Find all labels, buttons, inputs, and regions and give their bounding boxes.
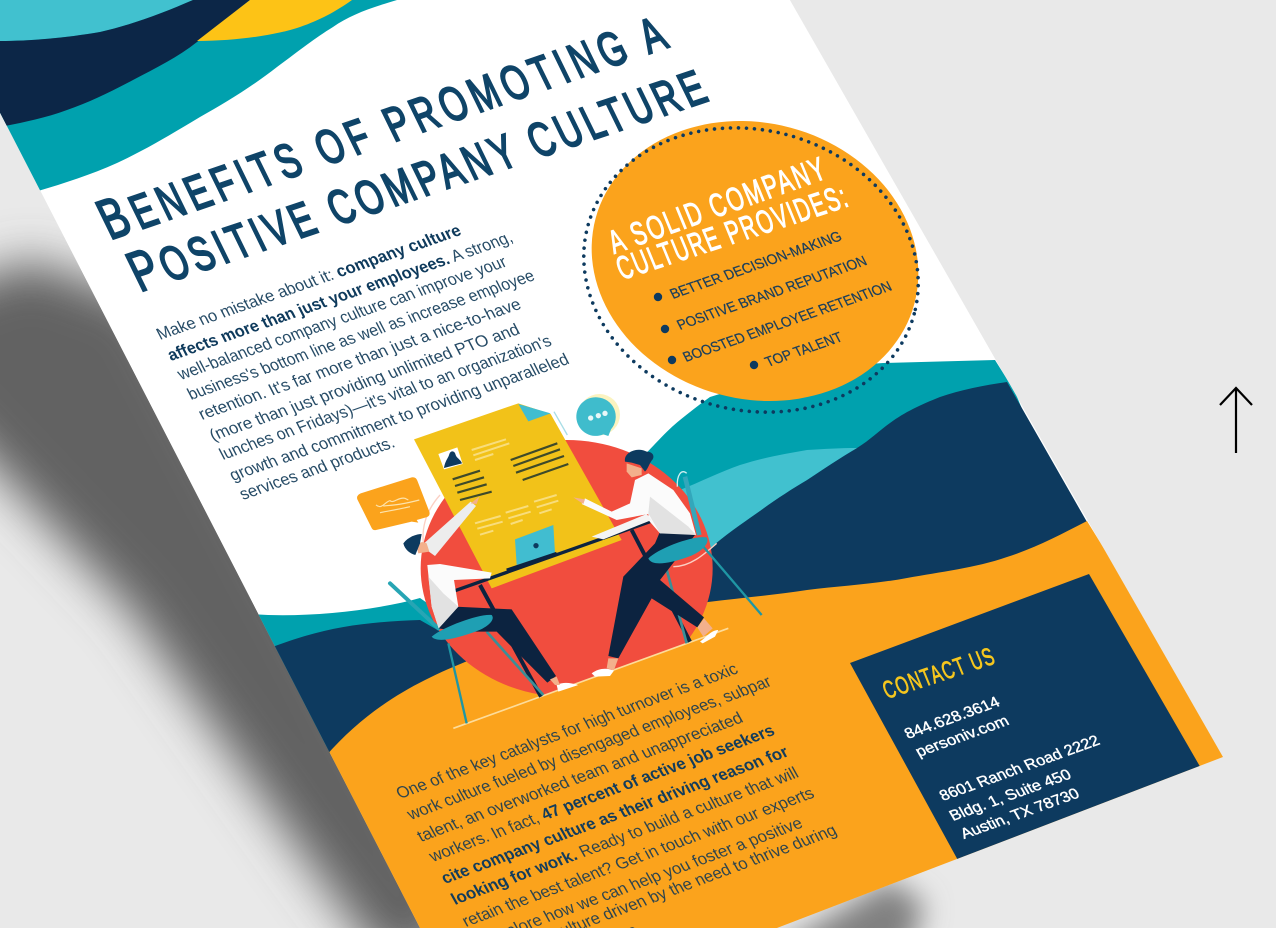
floor line [453, 628, 728, 728]
lower right wave: teal [648, 360, 1022, 548]
list item 1: BETTER DECISION-MAKING [667, 229, 845, 303]
intro line 5: retention. It's far more than just a nice-to-have [195, 295, 524, 424]
top wave: teal [0, 0, 397, 191]
photo silhouette [444, 451, 462, 468]
bottom line 5: cite company culture as their driving reason for [438, 742, 792, 887]
bottom line 1: One of the key catalysts for high turnover is a toxic [393, 659, 742, 802]
lower right wave: navy [707, 382, 1087, 602]
intro line 1: Make no mistake about it: company culture [153, 221, 464, 344]
bottom line 3: talent, an overworked team and unappreciated [414, 709, 746, 845]
photo [438, 447, 463, 469]
title line 1: BENEFITS OF PROMOTING A [87, 0, 676, 252]
illustration: two people at a desk with a resume [357, 394, 762, 728]
scroll-up arrow [1220, 388, 1252, 453]
dotted ring [582, 126, 920, 414]
document sheet [414, 403, 622, 588]
lower left wave: teal [258, 598, 440, 752]
sheet edge accent [554, 412, 567, 435]
laptop [507, 525, 557, 570]
title line 2: POSITIVE COMPANY CULTURE [117, 53, 716, 304]
folded corner [518, 404, 551, 421]
right person chair [665, 472, 762, 643]
bottom line 6: looking for work. Ready to build a culture that will [448, 764, 802, 908]
text lines dark [453, 443, 568, 500]
bottom paragraph [393, 659, 840, 928]
address line 3: Austin, TX 78730 [957, 786, 1083, 842]
list item 4: TOP TALENT [762, 330, 846, 371]
bottom line 2: work culture fueled by disengaged employees, subpar [403, 672, 775, 824]
left person seat [432, 615, 493, 640]
bullet 4 [750, 361, 758, 369]
intro line 2: affects more than just your employees. A strong, [164, 228, 516, 365]
callout heading line 1: A SOLID COMPANY [603, 150, 831, 261]
intro line 7: lunches on Fridays)—it's vital to an organization's [216, 331, 555, 464]
teal speech bubble [576, 394, 620, 436]
top wave: light teal [0, 0, 193, 41]
list item 3: BOOSTED EMPLOYEE RETENTION [680, 279, 895, 366]
top wave: navy [0, 0, 250, 126]
red circle [421, 440, 713, 697]
left person chair [390, 583, 543, 723]
website: personiv.com [912, 713, 1012, 760]
right person seat [648, 537, 708, 563]
bottom line 4: workers. In fact, 47 percent of active job seekers [425, 721, 778, 866]
title [94, 18, 710, 292]
lower right wave: light teal [682, 448, 857, 548]
list item 2: POSITIVE BRAND REPUTATION [674, 254, 870, 334]
resume document [414, 403, 622, 588]
cast shadow of the page [0, 260, 925, 928]
ring highlights [423, 495, 717, 567]
callout heading line 2: CULTURE PROVIDES: [611, 178, 853, 287]
orange circle callout [582, 121, 920, 414]
top wave: yellow [197, 0, 352, 41]
bullet 1 [654, 293, 662, 301]
intro line 3: well-balanced company culture can improve your [173, 252, 510, 384]
intro line 4: business's bottom line as well as increase employee [184, 266, 538, 404]
intro paragraph [153, 221, 572, 504]
desk [455, 522, 690, 697]
text lines light [472, 439, 558, 535]
contact box [850, 574, 1202, 864]
contact panel [850, 574, 1202, 864]
bottom line 7: retain the best talent? Get in touch with our experts [459, 784, 817, 928]
intro line 6: (more than just providing unlimited PTO and [206, 320, 523, 445]
intro line 8: growth and commitment to providing unparalleled [226, 350, 572, 485]
orange speech bubble [357, 477, 430, 530]
right person [573, 450, 718, 677]
address line 1: 8601 Ranch Road 2222 [936, 733, 1103, 804]
left person [403, 497, 578, 692]
orange bottom panel [325, 521, 1240, 928]
lower left wave: navy [274, 620, 466, 753]
circle background [592, 121, 918, 401]
address line 2: Bldg. 1, Suite 450 [946, 767, 1074, 824]
bullet 3 [668, 356, 676, 364]
phone: 844.628.3614 [901, 694, 1003, 742]
intro line 9: services and products. [236, 433, 398, 504]
bullet 2 [661, 325, 669, 333]
contact heading: CONTACT US [879, 643, 999, 704]
